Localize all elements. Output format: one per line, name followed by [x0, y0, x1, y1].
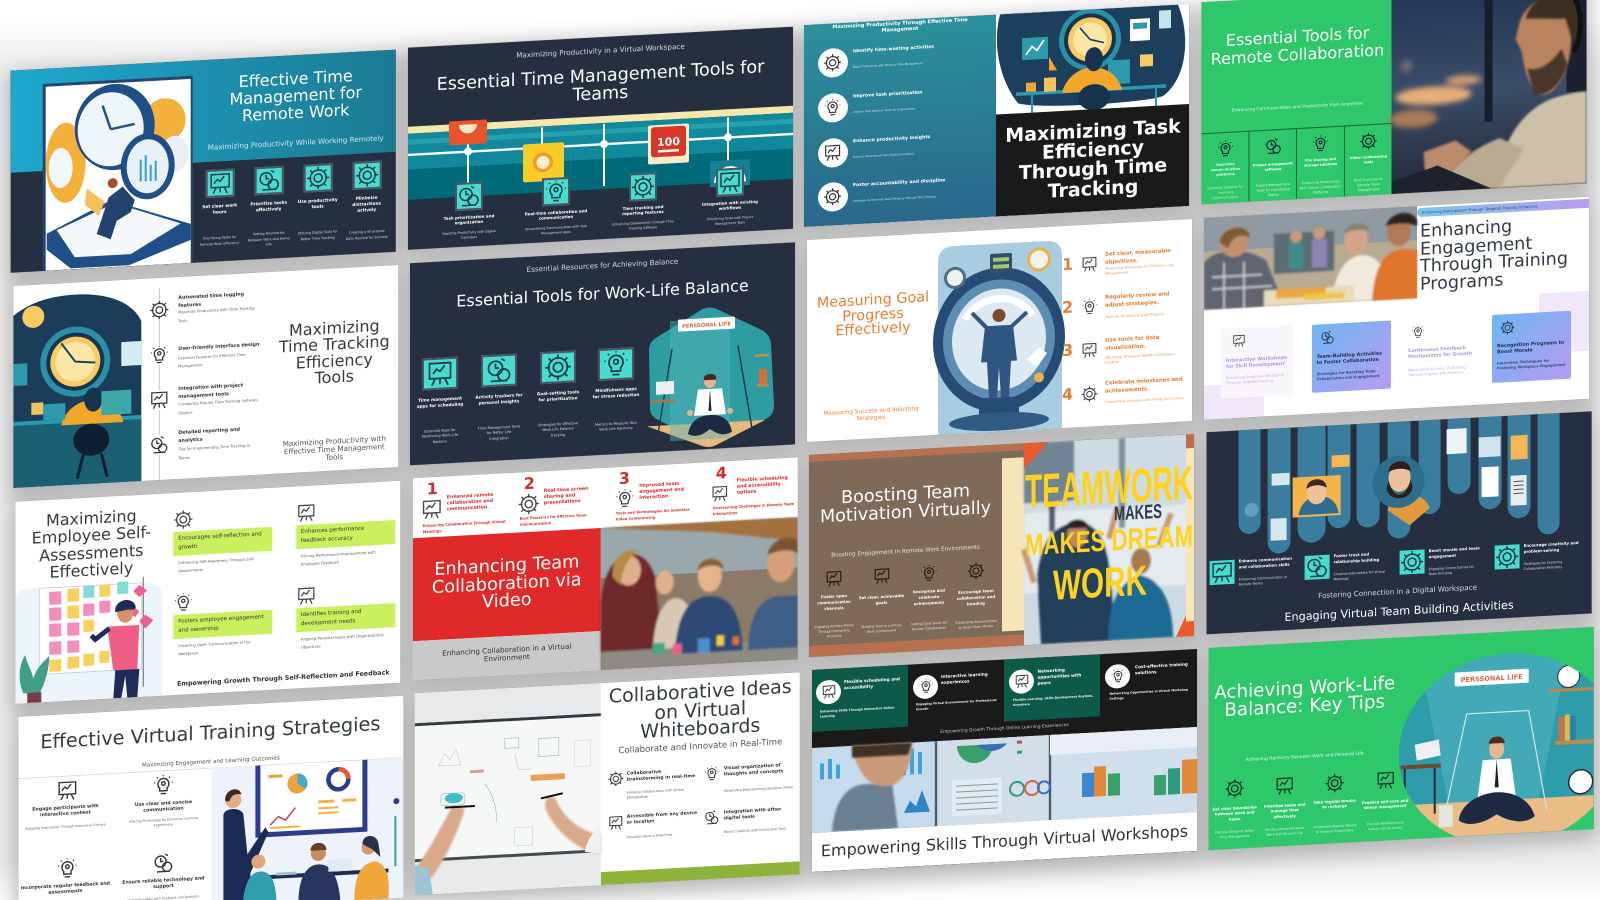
item: identify time wasting: Boost Productivity with Effective Time Management — [853, 61, 922, 69]
item: time tracking — [612, 172, 674, 231]
heading: Effective Time Management for Remote Work — [229, 66, 362, 125]
item: morale: Boost morale and team engagement — [1429, 545, 1480, 559]
item 3 — [1062, 335, 1174, 365]
illustration: person at desk under clock — [804, 4, 1189, 227]
item: communication — [1210, 553, 1302, 590]
card: interactive workshops: Enhancing Employee Motivation Through Targeted Training — [1226, 373, 1284, 386]
item: communication: Enhance communication and collaboration skills — [1239, 556, 1292, 570]
item: breaks: Take regular breaks to recharge — [1313, 798, 1356, 810]
item: minimize distractions — [346, 160, 388, 240]
item: prioritize tasks: Prioritize tasks effectively — [250, 201, 287, 213]
panel: Achieving Work-Life Balance: Key Tips — [1209, 627, 1594, 850]
illustration: person at desk under clock — [13, 288, 160, 488]
item: open communication: Foster open communication channels — [817, 593, 851, 611]
item: creativity: Strategies for Fostering Collaboration Remotely — [1524, 560, 1562, 571]
item: flexible scheduling: Enhancing Skills Through Interactive Online Learning — [820, 705, 894, 718]
heading: Maximizing Task Efficiency Through Time Tracking — [1005, 115, 1181, 202]
illustration: meditating person in hexagon: PERSSONAL LIFE — [682, 321, 731, 330]
panel: Boosting Team Motivation Virtually — [809, 434, 1194, 657]
illustration: meditating person in round window — [1398, 654, 1594, 836]
heading: Essential Tools for Work-Life Balance — [456, 276, 749, 311]
card: interactive workshops — [1226, 334, 1287, 386]
item: open communication — [811, 564, 857, 643]
item: reporting: Detailed reporting and analytics — [178, 428, 240, 444]
item: real-time collaboration — [525, 176, 587, 235]
card: recognition: Innovative Techniques for Fostering Workplace Engagement — [1497, 359, 1565, 371]
item: clear communication: Utilizing Technology for Enhanced Learning Experiences — [129, 816, 198, 827]
item: boundaries: Set clear boundaries between work and home — [1213, 804, 1257, 822]
card: recognition: Recognition Programs to Boost Morale — [1497, 341, 1564, 356]
item: interactive content: interactive content — [40, 811, 91, 819]
heading: Enhancing Team Collaboration via Video — [432, 552, 582, 613]
card: feedback: Measurable Success: Evaluating Training Program Effectiveness — [1408, 365, 1466, 378]
item: set clear work hours: Set clear work hours — [202, 203, 237, 216]
photo: team around table — [413, 457, 798, 680]
timeline band illustration — [408, 106, 793, 200]
item: cost-effective — [1105, 657, 1195, 708]
item: real-time collaboration: Streamlining Communication with Task Management Apps — [525, 224, 587, 235]
item: productivity tools: Utilizing Digital Tools for Better Time Tracking — [298, 229, 338, 241]
item: interactive experiences — [913, 668, 1003, 718]
item: clear communication: Use clear and concise — [135, 800, 192, 808]
card: recognition — [1492, 311, 1571, 383]
item: improve prioritization: Improve task prioritization — [853, 91, 922, 99]
item: integration: Comparing Popular Time Tracking Software Options — [178, 398, 258, 415]
item: minimize distractions: Creating a Structured Daily Routine for Success — [346, 229, 388, 240]
photo: TEAMWORK makes dream work — [809, 434, 1194, 657]
item: prioritize tasks — [248, 166, 290, 247]
subtitle: Fostering Connection in a Digital Workspace — [1318, 583, 1477, 600]
subtitle: Measuring Success and Adjusting Strategies — [823, 406, 919, 423]
pill subtitle — [1417, 199, 1589, 217]
column grid lines — [1202, 122, 1392, 202]
item: trust: Foster trust and relationship building — [1334, 551, 1379, 564]
footer caption: Empowering Growth Through Self-Reflection and Feedback — [177, 668, 390, 688]
panel: Maximizing Employee Self-Assessments Effectively — [15, 481, 400, 704]
item: improve prioritization: Analyze Time Spent on Tasks for Improvement — [853, 106, 915, 114]
item 1 — [421, 476, 509, 536]
item: productivity tools: Use productivity tools — [298, 198, 338, 210]
item 3: 3 — [619, 468, 630, 488]
item: breaks — [1311, 770, 1359, 838]
item: mindfulness — [592, 347, 640, 432]
item: project management: Project Management Tools for Distributed Teams — [1256, 182, 1290, 197]
item: friendly interface: User-friendly interface design — [178, 343, 259, 352]
item 2: Real-time screen sharing and presentations — [544, 487, 588, 506]
item 1: 1 — [1062, 254, 1073, 274]
item: clear communication — [118, 768, 208, 833]
item: project management — [1253, 138, 1293, 197]
heading: Measuring Goal Progress Effectively — [817, 289, 929, 339]
subtitle: Essential Resources for Achieving Balance — [527, 257, 678, 274]
item: achievable goals: Building Trust in a Virtual Work Environment — [862, 623, 901, 634]
illustration: person at sticky-note board — [15, 481, 400, 704]
item 1: Measuring Milestones for Effective Goal Management — [1105, 263, 1174, 276]
item: digital tools: Integration with other — [724, 807, 781, 815]
item 4: 4 — [1062, 384, 1073, 404]
item: feedback assessments — [20, 852, 110, 900]
item: visual organization — [703, 759, 795, 798]
item: goal setting: Strategies for Effective Work-Life Balance Tracking — [538, 421, 578, 437]
item: breaks: Incorporate Regular Breaks to Increase Productivity — [1313, 823, 1356, 834]
item 4: Celebrating Achievements Along the Journey — [1105, 396, 1183, 404]
item: accountability — [818, 178, 946, 212]
heading: Collaborative Ideas on Virtual Whiteboards — [609, 676, 792, 743]
item: celebrate: Setting Clear Goals for Remote Collaboration — [911, 620, 947, 631]
item: networking: Networking opportunities with peers — [1038, 667, 1081, 686]
item: brainstorming: Enhance Collaboration with Virtual Whiteboards — [627, 788, 684, 800]
item: clear communication: communication — [143, 806, 184, 814]
item: communication platforms: Essential Software for Seamless Communication — [1208, 185, 1243, 200]
panel: Essential Tools for Work-Life Balance — [410, 242, 795, 465]
heading: Effective Virtual Training Strategies — [40, 712, 380, 754]
item: video conferencing: Video conferencing tools — [1350, 154, 1387, 164]
item: networking: Flexible Learning: Skills Development Anytime, Anywhere — [1013, 694, 1093, 707]
item: reporting — [151, 427, 250, 460]
item: boundaries: Practical Steps for Better Time Management — [1215, 828, 1255, 839]
item: productivity tools — [298, 163, 338, 241]
item: reliable technology: support — [153, 884, 174, 890]
item: engagement: Fostering Open Communication in the Workplace — [178, 639, 251, 656]
item: bonding — [953, 557, 999, 635]
heading: Essential Time Management Tools for Teams — [437, 57, 764, 106]
illustration: meditating person in round window: PERSSONAL LIFE — [1461, 673, 1523, 684]
item: engagement: Fosters employee engagement and ownership — [178, 614, 264, 634]
heading: Engaging Virtual Team Building Activities — [1284, 599, 1514, 624]
item: minimize distractions: Minimize distractions actively — [352, 196, 381, 214]
item: self-care: Practice self-care and stress management — [1362, 798, 1408, 811]
item: interactive experiences: Engaging Virtual Environments for Professional Growth — [916, 698, 997, 711]
item: digital tools — [703, 803, 795, 842]
panel: Maximizing Time Tracking Efficiency Tools — [13, 265, 398, 488]
panel: Effective Virtual Training Strategies — [18, 696, 403, 900]
item 3: Adjusting Strategies Based on Progress Insights — [1105, 352, 1174, 365]
heading: Maximizing Employee Self-Assessments Effectively — [32, 506, 151, 582]
item 4 — [709, 460, 797, 520]
panel: Effective Time Management for Remote Work — [11, 50, 396, 273]
item 1: Set clear, measurable objectives. — [1105, 248, 1171, 265]
item: set clear work hours — [200, 168, 240, 246]
item: cost-effective: Cost-effective training solutions — [1135, 661, 1188, 675]
item: morale: Engaging Online Games for Team Bonding — [1429, 565, 1474, 576]
timeline band illustration: 100 — [657, 135, 680, 149]
item: reliable technology: Ensure reliable technology and — [122, 876, 205, 886]
item: creativity — [1495, 538, 1587, 575]
subtitle: Collaborate and Innovate in Real-Time — [618, 737, 782, 756]
item: feedback accuracy — [296, 497, 395, 568]
item: self-reflection: Encourages self-reflection and growth — [178, 531, 262, 551]
item: prioritize: Prioritize tasks and manage time effectively — [1264, 802, 1306, 819]
item 2: Tools for Monitoring Goal Progress — [1105, 312, 1165, 319]
item: activity trackers: Activity trackers for personal insights — [475, 392, 523, 405]
item 2 — [1062, 291, 1169, 319]
item: task prioritization: Task prioritization and organization — [444, 213, 494, 226]
item 2: 2 — [524, 474, 535, 493]
photo: man with headset at night — [1386, 0, 1586, 194]
item: video conferencing: Best Practices for Remote Team Engagement — [1354, 177, 1383, 192]
card: feedback — [1408, 326, 1472, 378]
item: trust — [1305, 548, 1397, 585]
item: integration — [702, 167, 758, 226]
item: identify time wasting: Identify time-wasting activities — [853, 45, 934, 54]
item: interactive content — [20, 774, 110, 839]
item: accessible: Visualize Ideas in Real-Time — [627, 833, 672, 839]
item: accountability: Foster accountability and discipline — [853, 178, 945, 188]
panel: Enhancing Team Collaboration via Video — [413, 457, 798, 680]
item: feedback assessments: Incorporate regular feedback and — [21, 882, 110, 891]
subtitle: Enhancing Communication and Productivity from Anywhere — [1232, 101, 1363, 114]
item: file sharing — [1300, 136, 1342, 195]
item: feedback assessments: assessments — [48, 889, 82, 896]
left header: Maximizing Productivity Through Effective Time Management — [832, 17, 968, 34]
item: interactive experiences: Interactive learning experiences — [941, 671, 988, 685]
item: feedback accuracy: Driving Performance Improvement with Employee Feedback — [301, 550, 376, 566]
item: achievable goals — [858, 562, 904, 640]
item: prioritize — [1261, 773, 1309, 841]
item: self-care — [1361, 767, 1409, 836]
heading: Enhancing Engagement Through Training Programs — [1420, 217, 1568, 295]
item: achievable goals: Set clear, achievable goals — [859, 593, 904, 605]
item 3: Use tools for data visualization. — [1105, 335, 1159, 352]
item: time management apps: Essential Apps for Monitoring Work-Life Balance — [422, 428, 458, 444]
panel: Essential Time Management Tools for Teams — [408, 27, 793, 250]
item: self-reflection — [173, 504, 272, 575]
subtitle: Maximizing Productivity in a Virtual Workspace — [516, 41, 685, 59]
item: self-care: Practice Mindfulness to Reduce Stress Levels — [1367, 820, 1404, 831]
subtitle: Achieving Harmony Between Work and Personal Life — [1246, 752, 1364, 763]
item: file sharing: File sharing and storage solutions — [1304, 157, 1337, 168]
item: flexible scheduling: Flexible scheduling and accessibility — [844, 676, 900, 690]
item: reliable technology — [118, 846, 208, 900]
item: brainstorming — [607, 764, 699, 803]
panel: Maximizing Task Efficiency Through Time Tracking — [804, 4, 1189, 227]
item 2: Best Practices for Effective Team Communication — [520, 513, 587, 526]
item 2: 2 — [1062, 297, 1073, 317]
item 4: Flexible scheduling and accessibility options — [737, 476, 788, 496]
item: training needs: Aligning Personal Goals with Organizational Objectives — [301, 632, 384, 649]
illustration: team at presentation board — [18, 696, 403, 900]
item: goal setting: Goal-setting tools for prioritization — [537, 389, 579, 402]
subtitle: Maximizing Productivity While Working Remotely — [208, 133, 384, 152]
item: productivity insights — [818, 135, 930, 168]
item: digital tools: digital tools — [724, 814, 755, 821]
item: creativity: Encourage creativity and problem-solving — [1524, 540, 1579, 554]
item: activity trackers — [475, 354, 523, 441]
item 1: Enhanced remote collaboration and communication — [447, 493, 493, 512]
item: goal setting — [537, 350, 579, 437]
item: trust: Creative Icebreakers for Virtual Meetings — [1334, 570, 1385, 581]
pill subtitle: Enhancing Participation Through Targeted Training Initiatives — [1422, 204, 1537, 215]
subtitle: Maximizing Productivity with Effective Time Management Tools — [283, 434, 386, 462]
panel: Essential Tools for Remote Collaboration — [1202, 0, 1586, 204]
item: activity trackers: Time Management Tools for Better Life Integration — [478, 424, 520, 441]
item: integration: Integration with project management tools — [178, 383, 243, 400]
heading: Essential Tools for Remote Collaboration — [1211, 23, 1384, 69]
item 3 — [613, 466, 701, 525]
heading: Boosting Team Motivation Virtually — [820, 481, 991, 527]
item: celebrate — [906, 559, 952, 638]
item: accountability: Strategies to Maximize Task Efficiency Through Time Tracking — [853, 194, 936, 203]
item: brainstorming: Collaborative brainstorming in real-time — [627, 769, 695, 782]
illustration: meditating person in hexagon — [647, 308, 774, 447]
subtitle: Enhancing Collaboration in a Virtual Environment — [442, 641, 571, 663]
item: automated logging — [150, 292, 255, 323]
item: task prioritization: Boosting Productivity with Digital Calendars — [443, 229, 495, 240]
item: automated logging: Maximize Productivity with Time Tracking Tools — [178, 306, 255, 323]
heading: Achieving Work-Life Balance: Key Tips — [1214, 673, 1395, 721]
item 3: Tools and Technologies for Seamless Video Conferencing — [616, 508, 690, 521]
item: project management: Project management software — [1253, 161, 1293, 172]
item: prioritize: Set Boundaries Between Work and Personal Life — [1265, 826, 1304, 837]
item: morale — [1400, 543, 1492, 580]
item: interactive content: Engage participants with — [32, 804, 99, 813]
panel: Empowering Skills Through Virtual Workshops — [812, 649, 1197, 872]
item: interactive content: Engaging Participants Through Interactive Content — [25, 822, 106, 830]
card: interactive workshops: Interactive Workshops for Skill Development — [1226, 356, 1287, 371]
item: integration — [151, 383, 258, 416]
item: communication platforms — [1208, 140, 1244, 200]
item: mindfulness: Metrics to Measure Your Work-Life Harmony — [595, 421, 637, 432]
dashboard photo — [812, 649, 1197, 872]
item: accessible — [607, 808, 699, 847]
item: identify time wasting — [818, 44, 934, 78]
item: time tracking: Time tracking and reporting features — [622, 203, 664, 217]
item: bonding: Encourage team collaboration and bonding — [957, 588, 995, 606]
item: digital tools: Boost Creativity with Interactive Tools — [724, 827, 786, 834]
item: prioritize tasks: Setting Boundaries Between Work and Home Life — [248, 231, 290, 247]
item 3: 3 — [1062, 340, 1073, 360]
item: engagement — [173, 587, 272, 658]
item: integration: Prioritizing Tasks with Project Management Tools — [707, 215, 753, 226]
item 4 — [1062, 376, 1184, 404]
item: time tracking: Enhancing Collaboration through Time Tracking Software — [612, 219, 674, 231]
item 4: Celebrate milestones and achievements. — [1105, 376, 1183, 394]
item 1: Enhancing Collaboration Through Virtual Meetings — [423, 520, 505, 534]
photo: TEAMWORK makes dream work: MAKES — [1114, 501, 1162, 525]
item: visual organization: thoughts and concepts — [724, 769, 783, 777]
card: team-building: Strategies for Boosting Team Collaboration and Engagement — [1317, 369, 1379, 382]
item: flexible scheduling — [816, 673, 906, 724]
panel: Enhancing Engagement Through Training Programs — [1204, 197, 1589, 420]
item: self-reflection: Enhancing Self-Awareness Through Self-Assessments — [178, 556, 254, 573]
subtitle: Boosting Engagement in Remote Work Environments — [831, 545, 980, 559]
item 4: Overcoming Challenges in Remote Team Interactions — [713, 502, 794, 516]
item: productivity insights: Tools for Streamlined Time Tracking Solutions — [853, 152, 914, 159]
photo: TEAMWORK makes dream work: WORK — [1053, 557, 1147, 609]
item: training needs: Identifies training and development needs — [301, 609, 361, 627]
item: training needs — [296, 580, 395, 651]
item: communication: Enhancing Communication in Remote Teams — [1239, 575, 1287, 587]
subtitle: Maximizing Engagement and Learning Outcomes — [142, 755, 280, 769]
item: video conferencing — [1350, 132, 1387, 192]
item: set clear work hours: Prioritizing Tasks for Remote Work Efficiency — [200, 235, 239, 246]
item: feedback accuracy: Enhances performance feedback accuracy — [301, 526, 364, 544]
panel: Engaging Virtual Team Building Activities — [1207, 411, 1592, 634]
item: integration: Integration with existing workflows — [702, 198, 758, 211]
item: open communication: Engaging Remote Teams Through Interactive Activities — [814, 623, 854, 639]
item 4: 4 — [716, 463, 727, 483]
item: time management apps — [416, 356, 463, 444]
heading: Empowering Skills Through Virtual Workshops — [821, 822, 1188, 861]
item 3: Improved team engagement and interaction — [639, 482, 684, 501]
panel: Measuring Goal Progress Effectively — [807, 219, 1192, 442]
item: boundaries — [1211, 775, 1259, 844]
photo: workshop group — [1204, 206, 1589, 420]
card: team-building: Team-Building Activities to Foster Collaboration — [1317, 352, 1382, 367]
item: friendly interface — [150, 342, 260, 369]
panel: Collaborative Ideas on Virtual Whiteboards — [415, 672, 800, 895]
item: productivity insights: Enhance productivity insights — [853, 135, 930, 144]
item: friendly interface: Essential Features for Effective Time Management — [178, 353, 246, 369]
illustration: clocks and person on tablet — [10, 50, 396, 271]
illustration: man in giant gauge — [933, 240, 1065, 435]
item: mindfulness: Mindfulness apps for stress reduction — [593, 386, 639, 399]
card: team-building — [1312, 321, 1391, 393]
illustration: capsule strips with faces — [1207, 411, 1592, 634]
item: visual organization: Visual organization of — [724, 763, 781, 771]
item: task prioritization — [442, 182, 496, 240]
item: communication platforms: Real-time communication platforms — [1211, 162, 1240, 177]
item: time management apps: Time management apps for scheduling — [417, 395, 463, 409]
item: real-time collaboration: Real-time collaboration and communication — [525, 208, 587, 221]
item: file sharing: Enhancing Productivity with Virtual Collaboration Platforms — [1300, 179, 1341, 195]
item: visual organization: Streamline Brainstorming Sessions Online — [724, 785, 793, 792]
item 2 — [517, 471, 605, 531]
item: networking — [1009, 662, 1099, 713]
item: improve prioritization — [818, 90, 922, 122]
item: bonding: Celebrating Achievements to Boost Team Morale — [955, 619, 997, 630]
card: feedback: Continuous Feedback Mechanisms for Growth — [1408, 346, 1472, 361]
photo: hands writing on whiteboard — [415, 672, 800, 895]
item: reporting: Tips for Implementing Time Tracking in Teams — [178, 444, 250, 460]
item: accessible: Accessible from any device or location — [627, 811, 697, 826]
item: cost-effective: Networking Opportunities in Virtual Workshop Settings — [1110, 688, 1188, 701]
item 1: 1 — [427, 479, 438, 499]
item 2: Regularly review and adjust strategies. — [1105, 291, 1169, 309]
item 1 — [1062, 248, 1174, 276]
heading: Maximizing Time Tracking Efficiency Tools — [279, 316, 390, 388]
item: automated logging: Automated time logging features — [178, 292, 244, 309]
subtitle: Empowering Growth Through Online Learning Experiences — [940, 723, 1069, 735]
item: celebrate: Recognize and celebrate achievements — [913, 588, 945, 606]
